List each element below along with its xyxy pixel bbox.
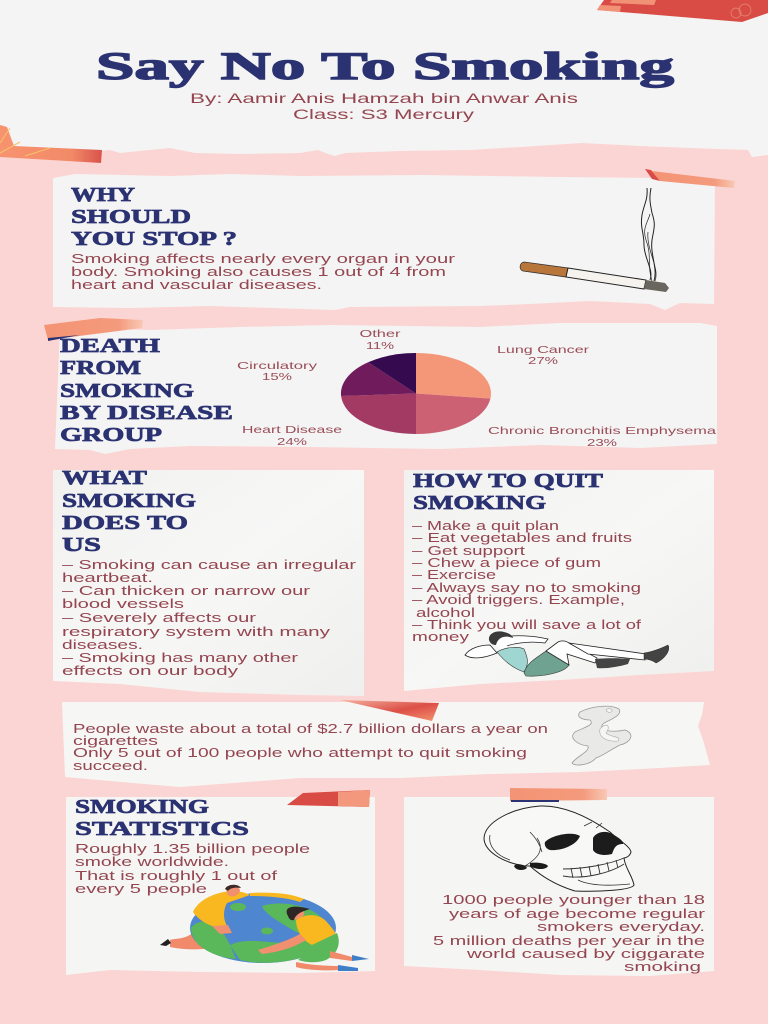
body text: succeed. (73, 758, 148, 773)
pie labels: Other (360, 328, 401, 340)
quit list: – Always say no to smoking (412, 580, 641, 595)
body text: world caused by ciggarate (465, 946, 705, 961)
quit list: – Get support (412, 543, 526, 558)
panel: cost and quit rate (62, 700, 710, 787)
heading: FROM (60, 357, 141, 379)
icon: people hugging the globe (160, 885, 369, 971)
panel: skull and deaths (404, 788, 714, 976)
panel: why should you stop (53, 169, 735, 310)
heading: SMOKING (413, 492, 547, 514)
pie labels: Circulatory (237, 360, 318, 372)
tape (340, 700, 439, 721)
body text: every 5 people (75, 881, 207, 896)
title: Say No To Smoking (96, 45, 675, 88)
heading: BY DISEASE (60, 402, 233, 424)
body text (62, 557, 357, 678)
icon: skull (484, 806, 634, 891)
heading: HOW TO QUIT (413, 470, 604, 492)
icon: smoke (572, 706, 631, 765)
pie labels: 23% (587, 437, 617, 449)
body text: People waste about a total of $2.7 billion dollars a year on (73, 721, 548, 736)
pie chart (341, 353, 491, 434)
tape (645, 169, 735, 188)
body text: – Smoking can cause an irregular (62, 557, 357, 572)
body text: body. Smoking also causes 1 out of 4 from (71, 264, 446, 279)
pie labels: 15% (262, 371, 292, 383)
body text: smoking (624, 959, 701, 974)
body text: – Can thicken or narrow our (62, 583, 311, 598)
heading: SMOKING (62, 490, 197, 512)
heading (71, 184, 237, 250)
panel: smoking statistics (66, 790, 375, 975)
heading: DOES TO (62, 512, 188, 534)
tape (287, 790, 370, 807)
header panel (0, 0, 768, 163)
body text: cigarettes (73, 733, 159, 748)
panel: how to quit smoking (404, 470, 714, 691)
pie labels: Lung Cancer (497, 344, 590, 356)
pie labels: 27% (528, 355, 558, 367)
heading: STATISTICS (75, 818, 249, 840)
quit list: – Exercise (412, 567, 496, 582)
pie labels: 11% (366, 340, 394, 352)
heading: US (62, 534, 101, 556)
quit list (412, 518, 642, 644)
quit list: alcohol (416, 605, 475, 620)
quit list: – Make a quit plan (412, 518, 559, 533)
pie labels: Chronic Bronchitis Emphysema (488, 425, 716, 437)
heading: GROUP (60, 424, 162, 446)
tape (510, 788, 607, 802)
body text (71, 251, 456, 292)
heading: WHY (71, 184, 136, 206)
body text: diseases. (62, 637, 143, 652)
heading: DEATH (60, 335, 161, 357)
body text: – Smoking has many other (62, 650, 299, 665)
heading (413, 470, 604, 514)
icon: person doing sit-up (465, 631, 669, 676)
body text: heartbeat. (62, 570, 153, 585)
body text: That is roughly 1 out of (75, 868, 278, 883)
body text (75, 841, 310, 896)
heading (60, 335, 233, 446)
heading: WHAT (62, 467, 148, 489)
body text: 5 million deaths per year in the (433, 933, 705, 948)
author line: By: Aamir Anis Hamzah bin Anwar Anis (190, 90, 578, 106)
heading: SMOKING (75, 796, 210, 818)
class line: Class: S3 Mercury (293, 106, 474, 122)
pie labels (237, 328, 716, 449)
body text: Only 5 out of 100 people who attempt to quit smoking (73, 745, 527, 760)
body text: smoke worldwide. (75, 854, 229, 869)
quit list: – Avoid triggers. Example, (412, 592, 625, 607)
panel: what smoking does to us (53, 467, 364, 696)
panel: death by disease group (44, 318, 717, 454)
icon: cigarette with smoke (520, 188, 669, 292)
quit list: – Think you will save a lot of (412, 617, 642, 632)
heading: YOU STOP ? (71, 228, 237, 250)
body text: Roughly 1.35 billion people (75, 841, 310, 856)
pie labels: 24% (277, 436, 307, 448)
heading: SMOKING (60, 380, 195, 402)
body text: smokers everyday. (537, 919, 705, 934)
tape: top left (0, 125, 102, 163)
heading (62, 467, 197, 556)
body text: years of age become regular (449, 906, 706, 921)
body text (73, 721, 548, 773)
body text: blood vessels (62, 596, 185, 611)
heading: SHOULD (71, 206, 191, 228)
tape (44, 318, 143, 341)
tape: top right (597, 0, 768, 22)
body text: 1000 people younger than 18 (442, 892, 705, 907)
quit list: – Chew a piece of gum (412, 555, 601, 570)
heading (75, 796, 249, 840)
body text: effects on our body (62, 663, 239, 678)
body text: respiratory system with many (62, 624, 331, 639)
body text: heart and vascular diseases. (71, 277, 322, 292)
body text: Smoking affects nearly every organ in your (71, 251, 456, 266)
body text: – Severely affects our (62, 610, 257, 625)
body text (433, 892, 706, 974)
pie labels: Heart Disease (242, 424, 342, 436)
quit list: – Eat vegetables and fruits (412, 530, 633, 545)
quit list: money (412, 629, 470, 644)
